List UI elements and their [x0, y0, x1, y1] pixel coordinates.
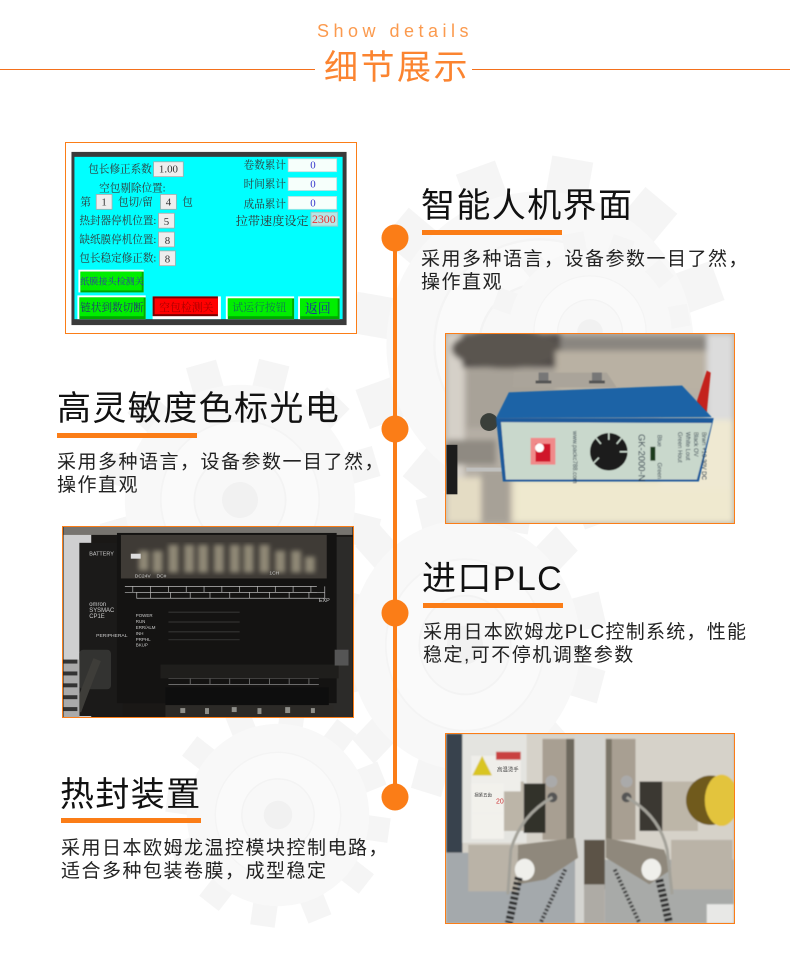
image: HMI touch screen: 5 [164, 216, 170, 228]
image: color mark sensor: Green Hout [676, 432, 682, 463]
text: imported PLC: 稳定,可不停机调整参数 [423, 645, 635, 666]
image: PLC: SYSMAC [89, 608, 115, 614]
image: color mark sensor: Blue [655, 435, 661, 447]
image: HMI touch screen [65, 142, 357, 334]
image: HMI touch screen: 0 [310, 160, 316, 172]
image: HMI touch screen: 链状到数切断 [80, 301, 144, 314]
image: HMI touch screen: 8 [165, 235, 171, 247]
image: HMI touch screen: 包长修正系数 [88, 163, 152, 176]
image: color mark sensor [445, 333, 735, 524]
underline [422, 230, 562, 235]
image: HMI touch screen: 时间累计 [244, 178, 286, 191]
image: HMI touch screen: 返回 [305, 302, 331, 316]
image: HMI touch screen: 包长稳定修正数: [79, 252, 156, 265]
image: color mark sensor: White Lout [684, 432, 690, 461]
image: HMI touch screen: 2300 [312, 212, 336, 226]
image: PLC: INH [136, 631, 143, 636]
image: HMI touch screen: 8 [165, 254, 171, 266]
image: PLC: BATTERY [89, 552, 114, 558]
image: heat seal device: 20 [496, 798, 504, 805]
image: PLC: EXP [319, 598, 330, 604]
image: PLC: POWER [136, 613, 153, 618]
image: HMI touch screen: 纸膜接头检测关 [80, 276, 144, 287]
image: HMI touch screen: 空包检测关 [159, 300, 214, 314]
image: HMI touch screen: 第 [80, 195, 91, 208]
image: HMI touch screen: 热封器停机位置: [79, 214, 156, 227]
text: smart HMI: 操作直观 [421, 272, 503, 293]
text: color sensor [57, 452, 385, 496]
image: PLC: PRPHL [136, 637, 151, 642]
image: PLC: CP1E [89, 614, 105, 620]
timeline [382, 224, 408, 810]
text: heat seal [61, 838, 389, 882]
text: smart HMI [421, 248, 749, 293]
image: color mark sensor: Green [655, 463, 661, 479]
image: HMI touch screen: 卷数累计 [244, 159, 286, 172]
image: HMI touch screen: 缺纸膜停机位置: [79, 233, 156, 246]
underline [423, 603, 563, 608]
text: imported PLC [423, 622, 747, 666]
heading rule right [472, 69, 790, 70]
buttons [77, 270, 340, 319]
image: HMI touch screen: 0 [310, 179, 316, 191]
image: HMI touch screen: 空包剔除位置: [99, 181, 166, 194]
image: PLC: 1CH [269, 570, 280, 576]
heading rule left [0, 69, 315, 70]
text: smart HMI: 采用多种语言，设备参数一目了然， [421, 249, 749, 270]
image: color mark sensor: Black OV [692, 432, 698, 457]
image: HMI touch screen: 包 [182, 195, 193, 208]
image: color mark sensor: Brwn +10-30V DC [700, 432, 706, 481]
image: HMI touch screen: 包切/留 [118, 195, 153, 208]
image: HMI touch screen: 试运行按钮 [232, 300, 287, 314]
image: PLC: DC# [157, 573, 167, 579]
text: heat seal: 适合多种包装卷膜，成型稳定 [61, 861, 328, 882]
image: PLC: RUN [136, 619, 145, 624]
image: HMI touch screen: 1.00 [159, 164, 179, 176]
image: HMI touch screen: 成品累计 [244, 197, 286, 210]
heading: smart HMI: 智能人机界面 [421, 187, 633, 225]
image: PLC: PERIPHERAL [96, 633, 128, 639]
image: color mark sensor: GK-2000-N [636, 434, 647, 482]
heading: color sensor: 高灵敏度色标光电 [57, 390, 340, 428]
image: PLC: ERR/ALM [136, 625, 156, 630]
image: PLC [62, 526, 354, 718]
text: color sensor: 操作直观 [57, 475, 139, 496]
main heading: 细节展示 [324, 49, 470, 87]
subtitle: Show details: Show details [317, 21, 473, 41]
image: PLC: BKUP [136, 643, 148, 648]
image: PLC: DC24V [135, 573, 151, 579]
image: HMI touch screen: 4 [166, 196, 172, 208]
image: heat seal device: 高温烫手 [497, 766, 519, 774]
text: imported PLC: 采用日本欧姆龙PLC控制系统，性能 [423, 622, 747, 643]
image: color mark sensor: www.packc788.com [571, 430, 577, 483]
heading: imported PLC: 进口PLC [422, 560, 563, 598]
image: PLC: omron [89, 602, 106, 608]
image: HMI touch screen: 0 [310, 197, 316, 209]
heading: heat seal: 热封装置 [60, 776, 202, 814]
text: heat seal: 采用日本欧姆龙温控模块控制电路， [61, 838, 389, 859]
text: color sensor: 采用多种语言，设备参数一目了然， [57, 452, 385, 473]
image: HMI touch screen: 拉带速度设定 [236, 213, 309, 228]
image: heat seal device: 捆紧五齿 [474, 791, 493, 798]
image: HMI touch screen: 1 [101, 196, 107, 208]
underline [61, 818, 201, 823]
image: heat seal device [445, 733, 735, 924]
underline [57, 433, 197, 438]
